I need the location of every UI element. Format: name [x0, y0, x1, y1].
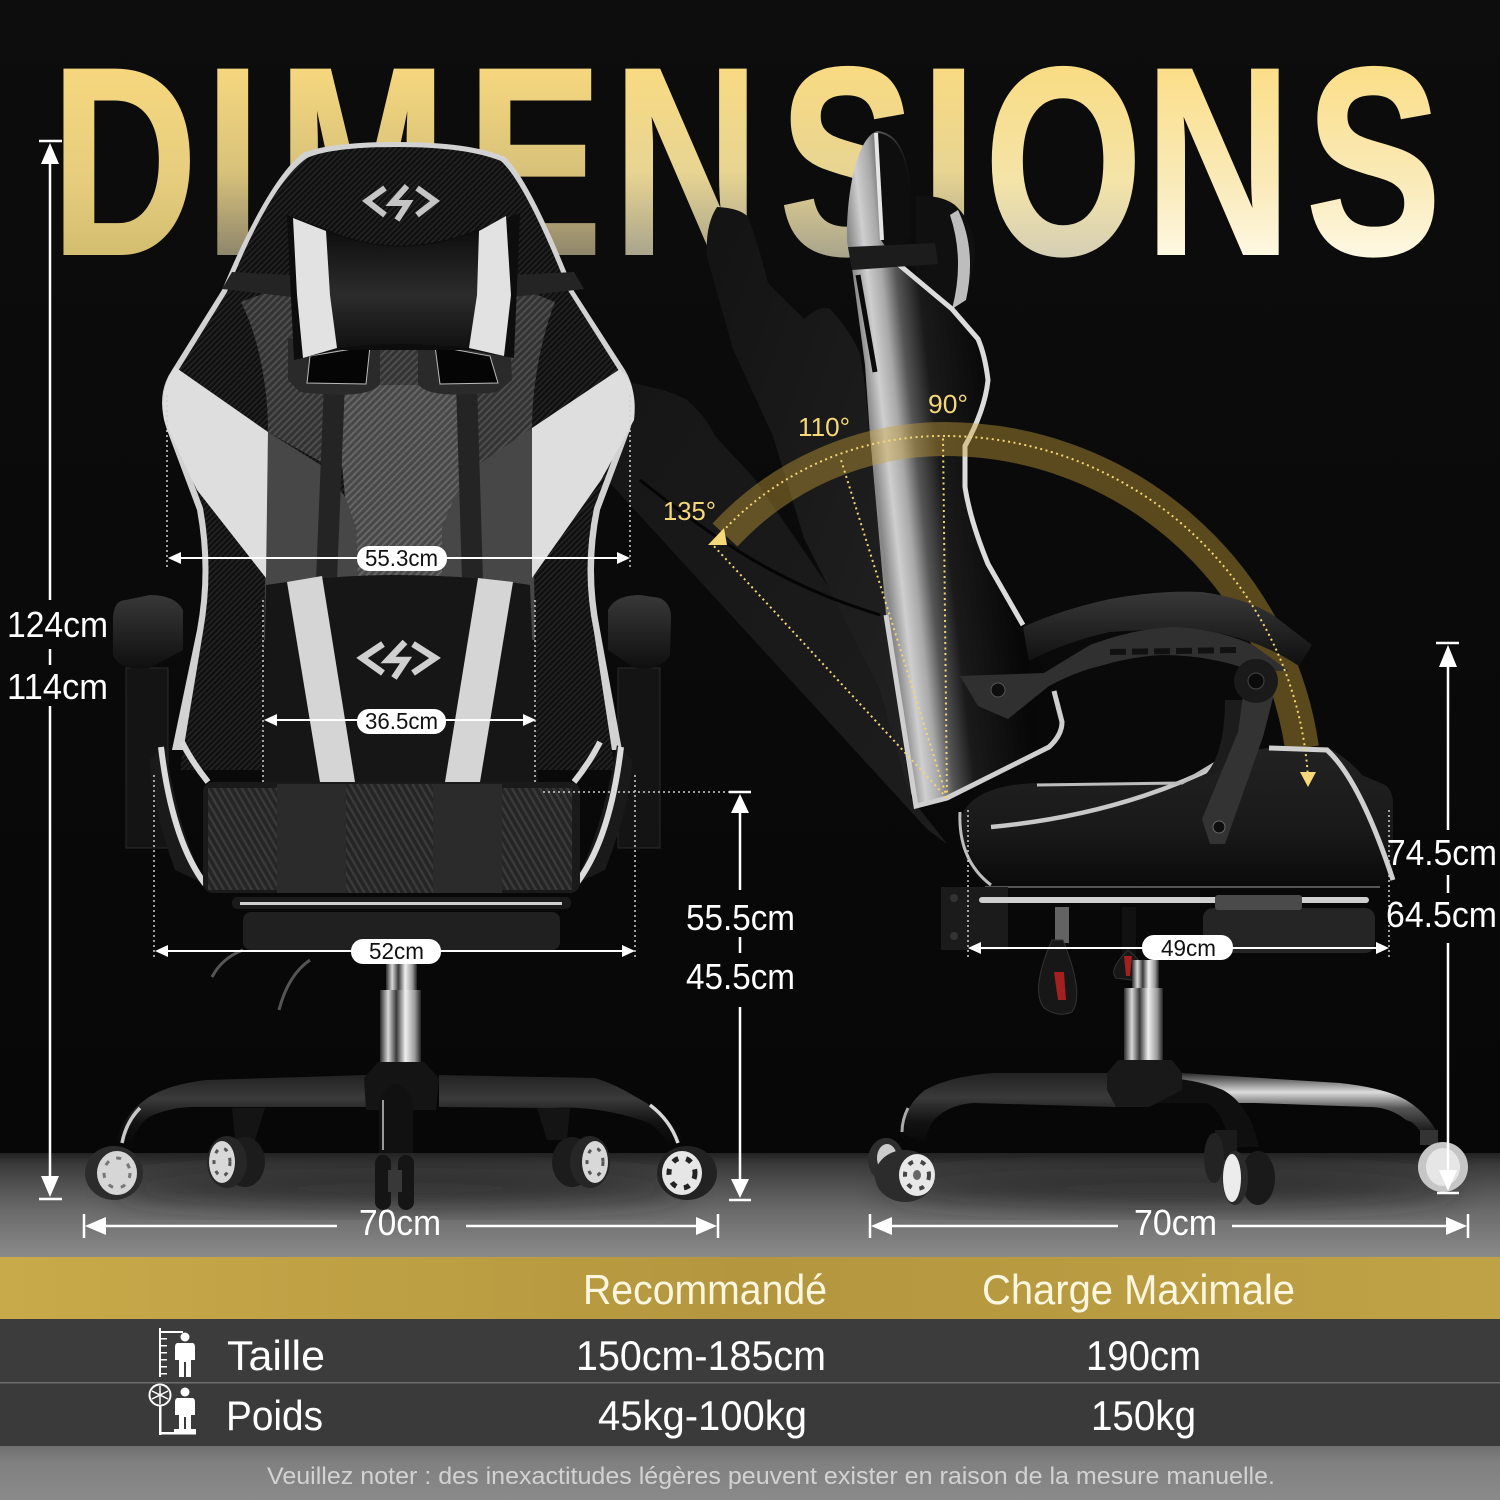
front chair: upper carbon panel — [241, 280, 555, 467]
dimension: seat width — [155, 938, 635, 964]
dimension: seat height — [686, 792, 795, 1200]
front chair: headrest slots — [288, 338, 512, 395]
front chair: lumbar logo — [362, 642, 435, 678]
front chair: grey side panel right — [442, 428, 535, 640]
dimension guide dots — [154, 395, 1389, 960]
front chair: wheels — [85, 1108, 717, 1210]
table row: poids: Poids — [226, 1392, 323, 1439]
front chair: white wing left — [163, 367, 268, 578]
footer note: Veuillez noter : des inexactitudes légères peuvent exister en raison de la mesure manuelle. — [267, 1463, 1275, 1490]
angle label 135: 135° — [663, 496, 716, 526]
title: I — [920, 13, 977, 311]
title: N — [613, 13, 760, 311]
recline arc — [712, 436, 1302, 798]
dimension: back width: 55.3cm — [365, 545, 438, 571]
front chair: seat cushion — [203, 782, 580, 893]
label 114cm: 114cm — [7, 666, 108, 707]
table row: poids: 150kg — [1091, 1392, 1196, 1439]
side chair: wheels — [868, 1130, 1468, 1205]
side chair: height levers — [1039, 907, 1147, 1014]
front chair: armrests — [113, 595, 671, 848]
front chair: backrest — [162, 142, 635, 770]
front chair: strap bars — [222, 272, 584, 297]
front chair: strap left — [316, 383, 345, 580]
dimension: base width side: 70cm — [1134, 1202, 1217, 1243]
angle label 110: 110° — [798, 412, 850, 442]
dimension: armrest height — [1387, 643, 1497, 1193]
angle label 90: 90° — [928, 389, 968, 419]
dimension: seat width: 52cm — [369, 938, 424, 964]
front chair: lumbar cushion — [262, 575, 538, 785]
dimension: back width — [168, 545, 630, 571]
table row: poids — [0, 1382, 1500, 1446]
label 124cm: 124cm — [7, 604, 108, 645]
front chair: column and base — [116, 963, 685, 1153]
table header band: Charge Maximale — [982, 1266, 1295, 1313]
front chair: white wing right — [532, 369, 635, 578]
table row: taille — [0, 1319, 1500, 1382]
table header band: Recommandé — [583, 1266, 827, 1313]
side chair: armrest and frame — [960, 592, 1312, 844]
title: S — [779, 13, 915, 311]
side chair: backrest — [847, 131, 1062, 806]
dimension: base width front — [84, 1202, 718, 1243]
front chair: strap right — [456, 383, 483, 580]
front chair: grey side panel left — [264, 432, 360, 640]
icon: height ruler with person — [159, 1328, 195, 1377]
front chair: headrest logo — [367, 186, 435, 220]
recline arrow heads and right dotted arc — [708, 436, 1316, 787]
table header band — [0, 1257, 1500, 1319]
title: O — [984, 13, 1143, 311]
dimension: seat depth side: 49cm — [1161, 935, 1216, 961]
title: S — [1306, 13, 1442, 311]
title: E — [467, 13, 602, 311]
dimension: base width front: 70cm — [359, 1202, 441, 1243]
front chair: seat wings — [150, 742, 632, 885]
floor — [0, 1153, 1500, 1257]
label 55.5cm: 55.5cm — [686, 897, 795, 938]
title: N — [1145, 13, 1292, 311]
side chair: column and base — [900, 960, 1439, 1147]
front chair: headrest pillow — [287, 213, 520, 360]
title: M — [277, 13, 447, 311]
table row: poids: 45kg-100kg — [598, 1392, 807, 1439]
footer note — [0, 1446, 1500, 1500]
title: D — [51, 13, 198, 311]
icon: scale with person — [150, 1384, 196, 1435]
dimension: seat depth side — [968, 935, 1389, 961]
side chair: rail and footrest — [941, 887, 1375, 953]
table row: taille: 150cm-185cm — [576, 1332, 826, 1379]
recline dotted guide lines — [712, 436, 947, 798]
title: I — [204, 13, 261, 311]
dimension: lumbar width — [264, 708, 536, 734]
table row: taille: Taille — [227, 1332, 325, 1379]
front chair: rail and footrest — [212, 897, 571, 1010]
dimension: lumbar width: 36.5cm — [365, 708, 438, 734]
dimension: base width side — [870, 1202, 1468, 1243]
table row: taille: 190cm — [1086, 1332, 1201, 1379]
front chair: centre strip — [335, 385, 475, 640]
dimension: total height front — [7, 141, 108, 1199]
label 45.5cm: 45.5cm — [686, 956, 795, 997]
side chair: reclined ghost backs — [600, 207, 947, 844]
side chair: seat — [960, 747, 1393, 887]
